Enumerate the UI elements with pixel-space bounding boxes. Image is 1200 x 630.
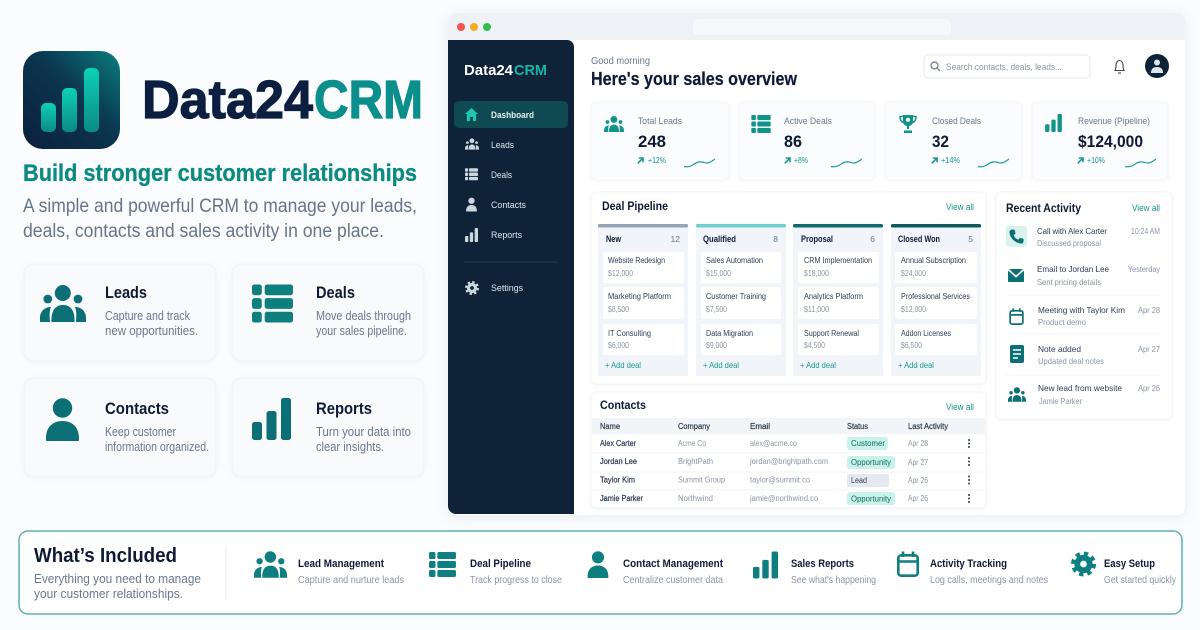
table header: Name xyxy=(600,422,621,431)
row: Taylor Kim: Apr 26 xyxy=(908,476,928,485)
KPI card: Closed Deals: 32 xyxy=(932,132,949,151)
included heading: What’s Included xyxy=(34,545,177,567)
column: Proposal: $11,000 xyxy=(804,305,829,314)
KPI card: Total Leads: 248 xyxy=(638,132,666,151)
column: Closed Won: Addon Licenses xyxy=(901,329,951,338)
panel: deal pipeline: View all xyxy=(946,202,974,212)
brand name: CRM xyxy=(314,70,423,130)
item: contact management: Contact Management xyxy=(623,558,723,570)
KPI card: Closed Deals: Closed Deals xyxy=(932,116,981,127)
feature card: Contacts: information organized. xyxy=(105,439,209,454)
nav: Contacts: Contacts xyxy=(491,200,526,211)
item: sales reports: See what's happening xyxy=(791,575,876,586)
activity: note: Apr 27 xyxy=(1138,345,1161,354)
activity: meeting: Product demo xyxy=(1038,317,1086,327)
column: New: IT Consulting xyxy=(608,329,651,338)
KPI card: Active Deals: 86 xyxy=(784,132,802,151)
row: Alex Carter xyxy=(600,437,970,450)
icon: bell xyxy=(1115,60,1124,73)
column: Qualified: $15,000 xyxy=(706,269,731,278)
column: Closed Won: + Add deal xyxy=(898,361,934,370)
column: Closed Won: $6,500 xyxy=(901,341,922,350)
intro paragraph xyxy=(23,196,417,242)
item: lead management: Capture and nurture leads xyxy=(298,575,404,586)
feature card: Deals xyxy=(232,264,424,361)
column: New: $12,000 xyxy=(608,269,633,278)
row: Jordan Lee xyxy=(600,456,970,469)
panel: contacts table: View all xyxy=(946,402,974,412)
column: New: $6,000 xyxy=(608,341,629,350)
feature card: Contacts: Contacts xyxy=(105,399,169,418)
column: Proposal: + Add deal xyxy=(800,361,836,370)
column: New: + Add deal xyxy=(605,361,641,370)
item: activity tracking: Activity Tracking xyxy=(930,558,1007,570)
row: Jordan Lee: Apr 27 xyxy=(908,458,928,467)
column: Closed Won: 5 xyxy=(968,234,973,244)
table header: Status xyxy=(847,422,868,431)
KPI card: Active Deals: +8% xyxy=(794,156,808,165)
greeting xyxy=(591,56,798,89)
KPI card: Revenue: $124,000 xyxy=(1078,132,1143,151)
feature card: Reports: Turn your data into xyxy=(316,424,411,439)
activity: email: Yesterday xyxy=(1128,265,1160,274)
icon: people xyxy=(40,285,86,322)
column: Closed Won xyxy=(891,224,981,376)
feature card: Contacts: Keep customer xyxy=(105,424,177,439)
column: Qualified: Sales Automation xyxy=(706,256,763,265)
row: Jamie Parker: Jamie Parker xyxy=(600,494,643,503)
tagline heading: Build stronger customer relationships xyxy=(23,160,417,187)
item: contact management: Centralize customer data xyxy=(623,575,723,586)
item: easy setup xyxy=(1073,554,1176,586)
item: deal pipeline: Deal Pipeline xyxy=(470,558,531,570)
row: Jordan Lee: Opportunity xyxy=(851,458,891,467)
icon: search xyxy=(931,62,940,71)
activity: email xyxy=(1008,264,1160,287)
icon: person xyxy=(46,398,79,441)
feature card: Leads: new opportunities. xyxy=(105,323,198,338)
nav: Contacts xyxy=(466,198,526,212)
row: Alex Carter: Customer xyxy=(851,439,885,448)
column: Proposal xyxy=(793,224,883,376)
feature card: Reports: Reports xyxy=(316,399,372,418)
panel: contacts table: Contacts xyxy=(600,398,646,412)
activity: new lead xyxy=(1008,383,1161,406)
column: Closed Won: $12,000 xyxy=(901,305,926,314)
greeting: Good morning xyxy=(591,56,650,67)
nav: Leads xyxy=(465,138,514,151)
row: Taylor Kim: Summit Group xyxy=(678,476,725,484)
icon: logo bars xyxy=(23,51,120,149)
nav: Settings: Settings xyxy=(491,283,523,294)
column: Proposal: Analytics Platform xyxy=(804,292,863,301)
feature card: Deals: Move deals through xyxy=(316,308,411,323)
item: sales reports: Sales Reports xyxy=(791,558,854,570)
column: Qualified: $7,500 xyxy=(706,305,727,314)
included heading: Everything you need to manage xyxy=(34,571,201,586)
row: Jordan Lee: Jordan Lee xyxy=(600,457,638,466)
activity: note: Note added xyxy=(1038,344,1081,354)
KPI card: Total Leads: +12% xyxy=(648,156,666,165)
column: Qualified: Customer Training xyxy=(706,292,766,301)
row: Taylor Kim: taylor@summit.co xyxy=(750,476,811,484)
activity: call: Call with Alex Carter xyxy=(1037,226,1107,236)
KPI card: Revenue: +10% xyxy=(1087,156,1105,165)
intro paragraph: deals, contacts and sales activity in one place. xyxy=(23,221,384,242)
panel: recent activity: Recent Activity xyxy=(1006,201,1081,215)
icon: list xyxy=(252,284,293,323)
item: deal pipeline xyxy=(429,552,562,586)
activity: meeting xyxy=(1010,305,1161,327)
KPI card: Total Leads xyxy=(591,102,729,180)
column: Qualified: Qualified xyxy=(703,234,736,244)
sidebar xyxy=(448,40,574,514)
row: Jamie Parker: Opportunity xyxy=(851,494,891,504)
column: Proposal: 6 xyxy=(870,234,875,244)
column: Qualified: Data Migration xyxy=(706,329,753,338)
panel: deal pipeline: Deal Pipeline xyxy=(602,199,668,213)
item: activity tracking: Log calls, meetings and notes xyxy=(930,575,1048,586)
column: Proposal: Support Renewal xyxy=(804,329,859,338)
activity: call: Discussed proposal xyxy=(1037,238,1101,248)
column: New: Website Redesign xyxy=(608,256,665,265)
panel: deal pipeline xyxy=(591,192,986,384)
column: Proposal: $18,000 xyxy=(804,269,829,278)
row: Jamie Parker: Apr 26 xyxy=(908,494,928,503)
nav: Dashboard xyxy=(454,101,568,128)
item: easy setup: Easy Setup xyxy=(1104,558,1155,570)
intro paragraph: A simple and powerful CRM to manage your leads, xyxy=(23,196,417,217)
row: Taylor Kim: Lead xyxy=(851,476,867,485)
table header: Company xyxy=(678,422,710,431)
nav: Reports: Reports xyxy=(491,230,522,241)
item: lead management xyxy=(254,551,404,586)
row: Alex Carter: Apr 28 xyxy=(908,439,928,448)
row: Jordan Lee: BrightPath xyxy=(678,457,713,466)
column: Closed Won: Professional Services xyxy=(901,292,970,301)
row: Alex Carter: alex@acme.co xyxy=(750,439,797,448)
panel: recent activity xyxy=(996,192,1172,419)
table header xyxy=(600,422,948,431)
activity: email: Email to Jordan Lee xyxy=(1037,264,1109,274)
nav: Deals: Deals xyxy=(491,170,512,181)
KPI card: Revenue: Revenue (Pipeline) xyxy=(1078,116,1150,127)
column: Qualified: 8 xyxy=(773,234,778,244)
item: lead management: Lead Management xyxy=(298,558,384,570)
KPI card: Revenue xyxy=(1032,102,1168,180)
column: Proposal: CRM Implementation xyxy=(804,256,872,265)
row: Jamie Parker xyxy=(600,492,970,505)
KPI card: Closed Deals: +14% xyxy=(941,156,960,165)
feature card: Deals: your sales pipeline. xyxy=(316,323,407,338)
panel: recent activity: View all xyxy=(1132,203,1160,213)
column: New: 12 xyxy=(671,234,680,244)
nav: Dashboard: Dashboard xyxy=(491,110,534,121)
row: Taylor Kim xyxy=(600,474,970,487)
feature card: Reports xyxy=(232,378,424,477)
row: Jamie Parker: jamie@northwind.co xyxy=(749,494,819,503)
item: easy setup: Get started quickly xyxy=(1104,575,1176,586)
row: Jamie Parker: Northwind xyxy=(678,494,713,503)
panel: contacts table xyxy=(591,392,986,508)
column: Closed Won: Closed Won xyxy=(898,234,940,244)
feature card: Reports: clear insights. xyxy=(316,439,384,454)
nav: Settings xyxy=(466,282,523,294)
column: Qualified xyxy=(696,224,786,376)
column: New: $8,500 xyxy=(608,305,629,314)
item: activity tracking xyxy=(898,552,1048,586)
feature card: Leads: Leads xyxy=(105,283,147,302)
sidebar logo: CRM xyxy=(514,62,547,79)
column: Proposal: $4,500 xyxy=(804,341,825,350)
column: New: New xyxy=(606,234,622,244)
sidebar logo: Data24 xyxy=(464,62,514,79)
logo lockup xyxy=(23,51,423,149)
activity: meeting: Meeting with Taylor Kim xyxy=(1038,305,1125,315)
column: Qualified: $9,000 xyxy=(706,341,727,350)
icon: user avatar xyxy=(1145,54,1169,78)
row: Alex Carter: Acme Co xyxy=(678,439,706,448)
browser window xyxy=(448,13,1185,515)
item: contact management xyxy=(588,551,723,586)
column: New xyxy=(598,224,688,376)
feature card: Leads xyxy=(24,264,216,361)
activity: new lead: Apr 26 xyxy=(1138,384,1161,393)
title bar xyxy=(448,13,1185,40)
item: deal pipeline: Track progress to close xyxy=(470,575,562,586)
KPI card: Active Deals xyxy=(739,102,875,180)
greeting: Here's your sales overview xyxy=(591,69,798,89)
row: Alex Carter: Alex Carter xyxy=(600,439,636,448)
icon: bars xyxy=(252,398,291,440)
nav: Leads: Leads xyxy=(491,140,514,151)
column: Proposal: Proposal xyxy=(801,234,833,244)
activity: meeting: Apr 28 xyxy=(1138,306,1161,315)
activity: email: Sent pricing details xyxy=(1037,277,1101,287)
brand name: Data24 xyxy=(142,70,313,130)
activity: note: Updated deal notes xyxy=(1038,356,1104,366)
nav: Deals xyxy=(465,168,512,181)
KPI card: Closed Deals xyxy=(885,102,1022,180)
KPI card: Active Deals: Active Deals xyxy=(784,116,832,127)
search box xyxy=(924,55,1090,78)
feature card: Contacts xyxy=(24,378,216,477)
row: Jordan Lee: jordan@brightpath.com xyxy=(749,457,828,466)
activity: new lead: Jamie Parker xyxy=(1039,396,1082,406)
feature card: Leads: Capture and track xyxy=(105,308,190,323)
activity: new lead: New lead from website xyxy=(1038,383,1122,393)
table header: Email xyxy=(750,422,770,431)
row: Taylor Kim: Taylor Kim xyxy=(600,476,635,484)
nav: Reports xyxy=(465,228,522,242)
feature card: Deals: Deals xyxy=(316,283,355,302)
panel: what's included xyxy=(19,531,1182,614)
item: sales reports xyxy=(753,552,876,586)
column: Qualified: + Add deal xyxy=(703,361,739,370)
included heading xyxy=(34,545,201,601)
search box: Search contacts, deals, leads... xyxy=(946,62,1062,72)
included heading: your customer relationships. xyxy=(34,586,183,601)
table header: Last Activity xyxy=(908,422,948,431)
activity: call: 10:24 AM xyxy=(1131,227,1160,236)
activity: call xyxy=(1006,226,1160,248)
column: Closed Won: Annual Subscription xyxy=(901,256,966,265)
column: Closed Won: $24,000 xyxy=(901,269,926,278)
KPI card: Total Leads: Total Leads xyxy=(638,116,682,127)
column: New: Marketing Platform xyxy=(608,292,671,301)
activity: note xyxy=(1010,344,1161,366)
